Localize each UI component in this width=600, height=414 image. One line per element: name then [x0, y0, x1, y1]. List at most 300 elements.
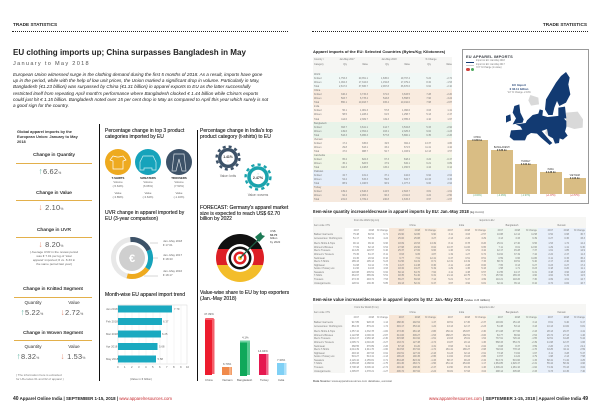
map total label: EU Import — [512, 83, 526, 87]
sweaters stats: (-3.64%) — [143, 194, 153, 198]
change in value — [16, 190, 92, 212]
table: selected countries: 503.7 — [341, 97, 347, 100]
table: item-wise value: 7.40 — [580, 370, 585, 373]
table: item-wise quantity: 37.19 — [514, 253, 520, 256]
table: item-wise value: 493.16 — [352, 352, 359, 355]
table: item-wise value: 42.17 — [464, 325, 470, 328]
table: item-wise quantity: 4.09 — [548, 278, 553, 281]
table: item-wise value: 0.91 — [383, 352, 388, 355]
woven segment: ↓ 1.53% — [60, 351, 86, 361]
table: selected countries: 2,063.1 — [360, 194, 368, 197]
table: item-wise quantity: 6.57 — [481, 271, 486, 274]
map total label: € 32.11 billion — [510, 87, 528, 91]
table: selected countries — [313, 57, 452, 202]
table: item-wise quantity: 273.15 — [352, 278, 359, 281]
table: item-wise value: 15.03 — [464, 355, 470, 358]
table: item-wise value: 1,281.16 — [511, 366, 520, 369]
table: item-wise value: 2.54 — [532, 334, 537, 337]
table: item-wise value: 133.72 — [397, 341, 404, 344]
heading: (Jan.-May 2018) — [200, 296, 236, 302]
table: selected countries: 47.9 — [384, 162, 389, 165]
target label: 62.70 — [270, 233, 277, 237]
table: item-wise value: 1.46 — [481, 366, 486, 369]
table: item-wise quantity: Accessories / Clothing Acc. — [314, 237, 343, 240]
table: item-wise quantity: 0.66 — [515, 257, 520, 260]
bar chart: 7 — [166, 365, 168, 369]
heading: Percentage change in India's top — [200, 128, 273, 134]
trousers stats — [171, 176, 187, 198]
t-shirts stats: T-SHIRTS — [112, 176, 124, 180]
table: item-wise quantity: 5.40 — [532, 260, 537, 263]
table: item-wise value: -2.30 — [383, 337, 388, 340]
map legend: Import to EU: Jan-May 2018 — [476, 60, 505, 62]
table: selected countries: 1,064.3 — [339, 81, 347, 84]
table: selected countries: 9.02 — [426, 130, 431, 133]
table: item-wise quantity: 25.37 — [398, 249, 404, 252]
table: item-wise value: 90.23 — [464, 359, 470, 362]
table: item-wise quantity: 6.65 — [481, 246, 486, 249]
table: selected countries: 2,354.2 — [360, 130, 368, 133]
table: item-wise quantity: 1.53 — [548, 242, 553, 245]
table: item-wise value: 513.41 — [367, 355, 374, 358]
table: item-wise quantity: 88.72 — [497, 260, 503, 263]
table: selected countries: 10,192.0 — [401, 101, 410, 104]
bar chart: 4 — [145, 365, 147, 369]
table: selected countries: 4,709.4 — [360, 198, 368, 201]
table: item-wise value: 823.19 — [413, 359, 420, 362]
title: EU clothing imports up; China surpasses Bangladesh in May — [13, 48, 246, 57]
table: item-wise value: 513.74 — [496, 359, 503, 362]
table: item-wise quantity: 165.33 — [513, 274, 520, 277]
bar labels: (-1.97%) — [521, 195, 530, 197]
table: selected countries: 1,096.6 — [402, 109, 410, 112]
table: selected countries: Total — [314, 182, 319, 185]
table: item-wise value: 1,966.18 — [365, 337, 374, 340]
panel: top 3 product categories — [105, 128, 192, 198]
table: selected countries: 47.0 — [342, 150, 347, 153]
table: item-wise value: 554.72 — [513, 341, 520, 344]
table: item-wise quantity: 7.11 — [499, 246, 503, 249]
share bar chart: China — [205, 378, 213, 382]
t-shirts stats: Volume — [113, 180, 123, 184]
intro label: 2018 — [17, 139, 26, 144]
table: selected countries: -1.61 — [447, 190, 452, 193]
table: selected countries: Vietnam — [314, 138, 323, 141]
table: selected countries: 4.22 — [426, 194, 431, 197]
table: item-wise quantity: 7.61 — [415, 257, 420, 260]
table: item-wise value: 737.91 — [496, 337, 503, 340]
table: selected countries: 56.1 — [342, 109, 347, 112]
table: selected countries: 67.3 — [384, 158, 389, 161]
UVR labels: Jan.-May 2017 — [163, 253, 182, 257]
table: selected countries: World — [314, 73, 320, 76]
table: item-wise quantity: 5.15 — [564, 274, 569, 277]
table: item-wise value: % Change — [574, 316, 585, 319]
bar chart — [106, 304, 190, 381]
table: item-wise value: 1.15 — [532, 359, 537, 362]
table: selected countries: Woven — [314, 81, 321, 84]
table: item-wise quantity: Vietnam — [557, 224, 566, 227]
table: selected countries: 6.62 — [426, 85, 431, 88]
table: item-wise value: 1.66 — [580, 341, 585, 344]
table: selected countries: Turkey — [314, 186, 321, 189]
table: selected countries: Woven — [314, 113, 321, 116]
table: selected countries: 54.2 — [342, 178, 347, 181]
table: item-wise value: -2.87 — [383, 334, 388, 337]
table: item-wise quantity: 11.5 — [581, 274, 585, 277]
table: item-wise value: -2.24 — [431, 370, 436, 373]
table: item-wise value: 87.43 — [398, 345, 404, 348]
table: item-wise value: 497.63 — [367, 352, 374, 355]
table: item-wise quantity: 5.85 — [383, 282, 388, 285]
table: item-wise value: 14.62 — [447, 355, 453, 358]
bar labels: TURKEY — [521, 160, 530, 162]
table: selected countries: 36,876.6 — [401, 85, 410, 88]
table: item-wise value: 27.13 — [563, 334, 569, 337]
table: item-wise value: Women's Blouses — [314, 334, 333, 337]
table: item-wise quantity: 8.26 — [481, 242, 486, 245]
table: item-wise quantity: 14.9 — [580, 249, 585, 252]
bar chart: 5.68 — [159, 344, 165, 348]
gear: wovens value: ↑ — [257, 172, 259, 176]
knitted segment: Quantity — [24, 300, 42, 305]
table: item-wise value: 1,378.21 — [365, 370, 374, 373]
table: item-wise value: 10.45 — [563, 370, 569, 373]
UVR labels: € 18.33 — [163, 257, 173, 261]
heading: countries table: Apparel imports of the EU: Selected Countries (Bytes/Kg; Kilotonnes) — [313, 48, 445, 54]
table: item-wise quantity: Nightwear — [314, 264, 325, 267]
table: item-wise quantity: 10.37 — [447, 246, 453, 249]
table: selected countries: 1,448.8 — [360, 166, 368, 169]
table: selected countries: Knitted — [314, 174, 321, 177]
bar: Bangladesh — [491, 150, 512, 194]
table: item-wise quantity: 1.72 — [564, 242, 569, 245]
table: selected countries: 11.41 — [425, 146, 431, 149]
knitted segment: Change in Knitted Segment — [23, 287, 83, 292]
table: item-wise value: -1.76 — [532, 348, 537, 351]
table: selected countries: 2,325.3 — [402, 130, 410, 133]
table: item-wise value: 32.51 — [547, 337, 553, 340]
map legend — [466, 59, 505, 71]
table: item-wise value: 3.14 — [532, 321, 537, 324]
table: selected countries: 2.47 — [447, 113, 452, 116]
table: item-wise quantity: 10.6 — [580, 260, 585, 263]
table: item-wise value: 1,695.71 — [350, 341, 359, 344]
bar: China — [466, 140, 488, 194]
table: item-wise value: 1.74 — [383, 325, 388, 328]
table: item-wise quantity: 13.19 — [464, 260, 470, 263]
table: item-wise value: -1.72 — [431, 348, 436, 351]
table: item-wise quantity: 6.47 — [431, 282, 436, 285]
table: item-wise value: -4.74 — [431, 341, 436, 344]
table: item-wise quantity: 64.70 — [414, 271, 420, 274]
table: item-wise value: 34.11 — [563, 348, 569, 351]
table: selected countries: 1,753.3 — [339, 77, 347, 80]
table: selected countries: 0.89 — [447, 162, 452, 165]
table: item-wise value: India — [459, 311, 464, 314]
table: item-wise value: 3.11 — [549, 352, 553, 355]
table: selected countries: Knitted — [314, 158, 321, 161]
table: item-wise quantity: 75.36 — [353, 253, 359, 256]
table: item-wise quantity: 2017 — [448, 229, 453, 232]
share bar chart: India — [278, 378, 285, 382]
table: selected countries: 57.8 — [384, 109, 389, 112]
table: item-wise quantity: 77.09 — [353, 246, 359, 249]
table: selected countries: Total — [314, 118, 319, 120]
table: item-wise value: 273.36 — [397, 330, 404, 333]
table: item-wise quantity: 19.27 — [414, 267, 420, 270]
table: item-wise value: 9.11 — [466, 345, 470, 348]
table: item-wise quantity: % Change — [425, 229, 436, 232]
table: item-wise quantity: 0.27 — [564, 264, 569, 267]
table: item-wise value: 2.68 — [481, 348, 486, 351]
table: item-wise quantity: 2018 — [515, 229, 520, 232]
table: item-wise value: 292.54 — [413, 321, 420, 324]
table: item-wise value: 9.17 — [580, 321, 585, 324]
table: item-wise value: 309.27 — [413, 334, 420, 337]
woven segment: Value — [68, 344, 80, 349]
table: item-wise value: 3,606.44 — [365, 366, 374, 369]
table: item-wise quantity: 8.16 — [383, 257, 388, 260]
table: item-wise quantity: 7.62 — [431, 271, 436, 274]
intro text: up in the period, while with the help of low unit prices, the Union marked a significant drop in volume. Particularly in May, — [13, 78, 260, 82]
table: item-wise quantity: 14.38 — [414, 264, 420, 267]
table: item-wise value: 2.26 — [548, 345, 553, 348]
table: selected countries: 6.92 — [426, 174, 431, 177]
table: selected countries: Jan-May 2018 — [381, 58, 397, 61]
table: item-wise value: 2,044.39 — [350, 348, 359, 351]
table: item-wise value: 792.04 — [496, 348, 503, 351]
table: selected countries: 1,081.3 — [360, 109, 368, 112]
table: selected countries: 4.86 — [447, 142, 452, 145]
table: item-wise quantity: Socks / Hosiery etc. — [314, 267, 335, 270]
table: item-wise value: Nightwear — [314, 352, 325, 355]
table: item-wise quantity: 36.4 — [580, 257, 585, 260]
table: item-wise value: 20.14 — [464, 341, 470, 344]
table: item-wise value: 1,122.58 — [350, 334, 359, 337]
category icons — [105, 149, 192, 175]
change in value: ↓ 2.10% — [38, 202, 64, 212]
table: item-wise quantity: 0.11 — [549, 257, 553, 260]
table: item-wise quantity: 5.21 — [448, 278, 453, 281]
table: item-wise quantity: 8.11 — [449, 242, 453, 245]
table: item-wise quantity: 4.11 — [449, 271, 453, 274]
table: item-wise value: 726.44 — [513, 337, 520, 340]
table: selected countries: 88.9 — [342, 182, 347, 185]
change in UVR: apparel' imported; € vs. 8.33 in — [33, 258, 75, 262]
table: item-wise quantity: 1.71 — [515, 267, 520, 270]
table: item-wise value: 310.92 — [413, 337, 420, 340]
table: item-wise value: 32.14 — [464, 352, 470, 355]
table: selected countries: 8.32 — [426, 81, 431, 84]
table: selected countries: Total — [314, 85, 319, 88]
table: item-wise value: 8.37 — [515, 345, 520, 348]
table: selected countries: 61.5 — [384, 113, 389, 116]
table: item-wise value: 31.23 — [447, 352, 453, 355]
table: item-wise quantity: Men's T-Shirts — [314, 260, 329, 263]
table: selected countries: 58.5 — [342, 113, 347, 116]
table: selected countries: 5.13 — [426, 113, 431, 116]
table: selected countries: 65.2 — [342, 158, 347, 161]
table: item-wise quantity: 41.96 — [353, 267, 359, 270]
intro text — [13, 72, 268, 108]
table: item-wise quantity: 2017 — [399, 229, 404, 232]
table: item-wise value: -2.23 — [481, 325, 486, 328]
table: selected countries: Woven — [314, 146, 321, 149]
table: item-wise quantity: 2.40 — [564, 260, 569, 263]
table: item-wise quantity: 32.86 — [414, 233, 420, 236]
table: item-wise value: 86.92 — [514, 334, 520, 337]
table: item-wise quantity: 27.40 — [514, 242, 520, 245]
intro text: could just hit € 1.15 billion. Bangladesh noted over 15 per cent drop in May as compared to April this year which surely is not — [13, 96, 268, 102]
table: item-wise value: Bangladesh — [506, 311, 518, 314]
table: item-wise value: 349.17 — [397, 325, 404, 328]
table: selected countries: 115.2 — [383, 166, 389, 169]
table: item-wise value: 1.47 — [431, 321, 436, 324]
table: item-wise value: 88.17 — [447, 359, 453, 362]
table: item-wise value: 4.25 — [580, 359, 585, 362]
table: item-wise quantity: 0.15 — [564, 257, 569, 260]
table: item-wise quantity: 51.40 — [414, 274, 420, 277]
table: item-wise value: % Change — [475, 316, 486, 319]
table: item-wise value: 2.26 — [383, 345, 388, 348]
table: item-wise value: 10.82 — [563, 325, 569, 328]
table: item-wise quantity: 12.14 — [514, 233, 520, 236]
table: item-wise value: 44.50 — [447, 366, 453, 369]
table: item-wise quantity: 35.14 — [514, 282, 520, 285]
table: item-wise value: 13.57 — [497, 355, 503, 358]
sweaters stats — [140, 176, 156, 198]
table: item-wise quantity: 385.09 — [367, 274, 374, 277]
right page footer: www.apparelresources.com | SEPTEMBER 1-15, 2018 | Apparel Online India 49 — [429, 396, 588, 402]
target label: billion — [270, 236, 277, 240]
table: selected countries: Qty — [427, 63, 431, 66]
bar chart: Jan 2018 — [106, 307, 118, 311]
table: item-wise quantity: 44.03 — [368, 267, 374, 270]
gear: knits value — [223, 155, 233, 163]
table: item-wise quantity: 4.90 — [532, 274, 537, 277]
table: item-wise quantity: 5.19 — [431, 267, 436, 270]
bar chart: 10 — [186, 365, 190, 369]
table: selected countries: 10.33 — [425, 178, 431, 181]
table: item-wise quantity: 90.12 — [353, 242, 359, 245]
table: selected countries: Knitted — [314, 109, 321, 112]
table: selected countries: 4.44 — [426, 166, 431, 169]
table: item-wise quantity: Men's Shirts & Tops — [314, 242, 335, 245]
table: item-wise value: 376.89 — [367, 345, 374, 348]
label: value knits: Value: knits — [220, 174, 236, 178]
heading: size is expected to reach US$ 62.70 — [200, 211, 280, 217]
target icon — [216, 232, 265, 282]
table: item-wise value: 251.12 — [446, 362, 453, 365]
table: item-wise quantity: 1.51 — [465, 249, 470, 252]
table: item-wise quantity: 13.49 — [430, 242, 436, 245]
table: selected countries: 5.33 — [426, 126, 431, 129]
table: item-wise quantity: 8.51 — [481, 257, 486, 260]
table: item-wise value: 2.86 — [431, 330, 436, 333]
table: selected countries: 414.7 — [383, 126, 389, 129]
table: selected countries: Bangladesh — [314, 122, 327, 125]
table: item-wise quantity: 0.23 — [548, 264, 553, 267]
share bar chart: Bangladesh — [237, 378, 253, 382]
trousers stats: TROUSERS — [171, 176, 187, 180]
table: item-wise value: 8.93 — [448, 345, 453, 348]
table: selected countries: 615.3 — [362, 178, 368, 181]
bar chart: 6.37 — [163, 320, 169, 324]
table: selected countries: 37.1 — [384, 174, 389, 177]
table: item-wise value: Undergarments — [314, 370, 330, 373]
share bar chart: 6.70% — [223, 362, 232, 366]
heading — [200, 128, 273, 140]
trousers stats: Volume — [174, 180, 184, 184]
table: item-wise quantity: T-Shirts — [314, 274, 322, 277]
table: item-wise value: 1,395.87 — [350, 370, 359, 373]
bar chart: May 2018 — [106, 357, 119, 361]
table: item-wise value: 438.30 — [413, 366, 420, 369]
table: item-wise quantity: 8.11 — [384, 253, 388, 256]
table: item-wise value: 25.01 — [464, 337, 470, 340]
table: item-wise quantity: 48.35 — [398, 274, 404, 277]
heading: Month-wise EU apparel import trend — [105, 292, 185, 298]
table: selected countries: Woven — [314, 97, 321, 100]
table: item-wise quantity: 7.42 — [532, 253, 537, 256]
table: item-wise quantity: % Change — [377, 229, 388, 232]
change in UVR: the same period last year) — [36, 262, 72, 266]
sweaters stats: (6.66%) — [143, 184, 153, 188]
bar labels: € 1.03 bn — [570, 178, 580, 180]
table: item-wise value: % Change — [377, 316, 388, 319]
table: item-wise quantity: 120.57 — [367, 249, 374, 252]
map panel: EU apparel imports — [462, 49, 589, 204]
table: item-wise value: 2017 — [399, 316, 404, 319]
table: item-wise quantity: China — [409, 224, 416, 227]
change in quantity: ↑6.62% — [39, 166, 61, 176]
table: item-wise value: 37.93 — [464, 370, 470, 373]
table: item-wise value: From the World (€ mn) — [354, 306, 378, 309]
table: item-wise quantity: 7.30 — [532, 278, 537, 281]
table: selected countries: 915.4 — [383, 101, 389, 104]
table: item-wise value: 76.43 — [563, 366, 569, 369]
table: item-wise value: 9.40 — [564, 321, 569, 324]
table: item-wise quantity: Trousers — [314, 278, 323, 281]
table: selected countries: 231.6 — [341, 198, 347, 201]
share bar chart: Vietnam — [222, 378, 233, 382]
table: item-wise value: Babies' Garments — [314, 321, 333, 324]
table: item-wise quantity: 12.4 — [580, 242, 585, 245]
bar chart: Apr 2018 — [106, 344, 118, 348]
table: item-wise quantity: 1.58 — [498, 267, 503, 270]
table: selected countries: Value — [362, 63, 368, 66]
left page header: TRADE STATISTICS — [13, 22, 57, 27]
UVR labels: Jan.-May 2018 — [163, 239, 182, 243]
table: selected countries: Total — [314, 134, 319, 137]
table: item-wise value: 84.77 — [497, 334, 503, 337]
table: item-wise quantity: 1.19 — [448, 253, 453, 256]
table: item-wise quantity: 7.37 — [532, 249, 537, 252]
table: item-wise value: 2018 — [515, 316, 520, 319]
heading: Percentage change in top 3 product — [105, 128, 184, 134]
table: selected countries: 1,845.0 — [381, 77, 389, 80]
map of Europe — [506, 72, 583, 145]
table: item-wise quantity: 2017 — [354, 229, 359, 232]
table: selected countries: 6,558.5 — [402, 97, 410, 100]
table: item-wise quantity: 29.90 — [398, 233, 404, 236]
table: item-wise value: 343.53 — [397, 348, 404, 351]
table: selected countries: 5.22 — [426, 77, 431, 80]
table: item-wise value: Trousers — [314, 366, 323, 369]
table: item-wise quantity: 2018 — [564, 229, 569, 232]
heading: categories imported by EU — [105, 134, 164, 140]
